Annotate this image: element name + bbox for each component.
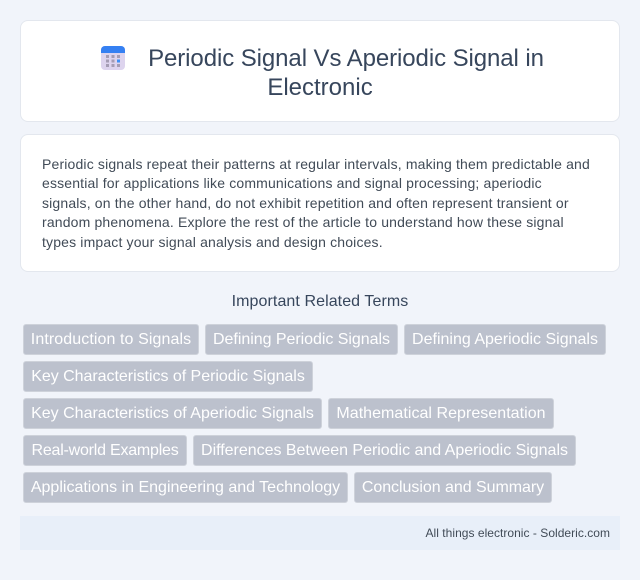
- footer: All things electronic - Solderic.com: [426, 526, 610, 540]
- tag: [23, 435, 187, 466]
- panel: summary text: Periodic signals repeat their patterns at regular intervals, making them predictable and: [42, 156, 590, 172]
- tag: [205, 324, 398, 355]
- tag: Conclusion and Summary: [362, 479, 544, 496]
- tag: [23, 361, 313, 392]
- heading: related terms: Important Related Terms: [232, 293, 408, 310]
- title: Periodic Signal Vs Aperiodic Signal in: [148, 45, 544, 72]
- tag: [354, 472, 552, 503]
- tag: Defining Aperiodic Signals: [412, 331, 598, 348]
- tag: Introduction to Signals: [31, 331, 191, 348]
- icon: calendar: [101, 46, 125, 70]
- tag: [23, 398, 322, 429]
- tag: Key Characteristics of Aperiodic Signals: [31, 405, 314, 422]
- title: [148, 45, 544, 101]
- panel: summary text: [20, 134, 620, 272]
- tag: [404, 324, 606, 355]
- footer: [20, 516, 620, 550]
- title card: [20, 20, 620, 122]
- panel: summary text: random phenomena. Explore the rest of the article to understand how these signal: [42, 214, 564, 230]
- tag: [328, 398, 554, 429]
- tag: [193, 435, 576, 466]
- tag: [23, 472, 348, 503]
- tag: Key Characteristics of Periodic Signals: [31, 368, 305, 385]
- tag: [23, 324, 199, 355]
- tag: Defining Periodic Signals: [213, 331, 390, 348]
- tag: Real-world Examples: [32, 442, 178, 459]
- panel: summary text: signals, on the other hand, do not exhibit repetition and often represent transient or: [42, 194, 569, 210]
- title: Electronic: [267, 74, 373, 101]
- panel: summary text: essential for applications like communications and signal processing; aperiodic: [42, 175, 542, 191]
- tag: Applications in Engineering and Technology: [31, 479, 340, 496]
- tag: Differences Between Periodic and Aperiodic Signals: [201, 442, 568, 459]
- tag: Mathematical Representation: [336, 405, 546, 422]
- panel: summary text: types impact your signal analysis and design choices.: [42, 234, 383, 250]
